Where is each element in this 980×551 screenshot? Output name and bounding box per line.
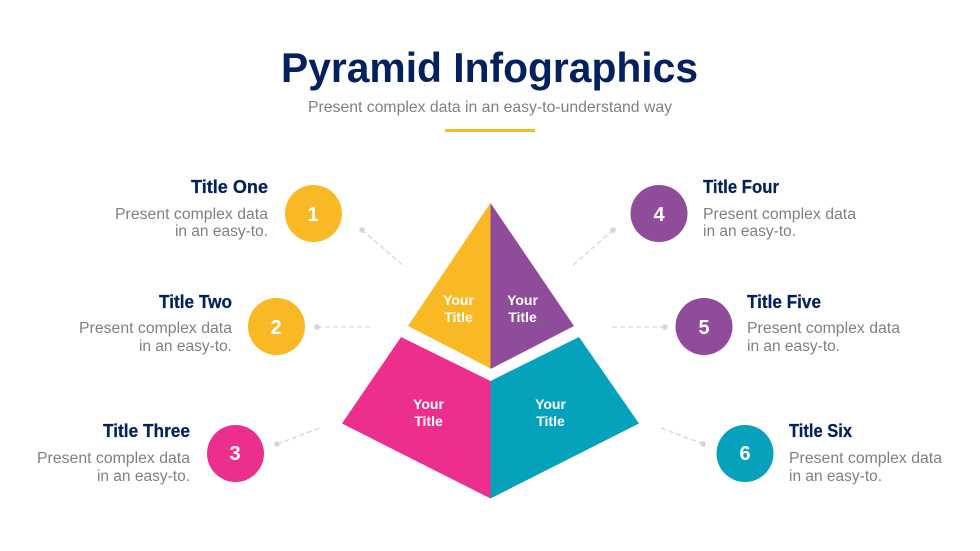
text block 2: Title Two [159, 292, 232, 312]
pyramid segment: pink bottom left: Your [413, 396, 444, 412]
pyramid segment: yellow top left: Title [444, 309, 473, 325]
connector 4 [571, 227, 616, 267]
text block 1: in an easy-to. [175, 223, 268, 240]
item 3 [37, 421, 264, 485]
pyramid segment: teal bottom right [490, 337, 639, 498]
pyramid segment: purple top right: Your [507, 292, 538, 308]
connector 2 [314, 324, 371, 330]
text block 1: Present complex data [115, 206, 268, 223]
connector 6 [661, 428, 706, 447]
item 5 [676, 292, 900, 355]
pyramid diagram [342, 203, 639, 498]
text block 3: Present complex data [37, 450, 190, 467]
item 6 [716, 421, 942, 485]
text block 5: Present complex data [747, 320, 900, 337]
text block 4 [703, 177, 856, 240]
text block 6: in an easy-to. [789, 468, 882, 485]
text block 4: in an easy-to. [703, 223, 796, 240]
pyramid segment: teal bottom right: Title [536, 413, 565, 429]
text block 6: Title Six [789, 421, 852, 441]
pyramid segment: purple top right [490, 203, 574, 369]
badge 3: 3 [229, 443, 241, 465]
badge 4: 4 [653, 204, 665, 226]
badge 5 [676, 298, 732, 355]
text block 6 [789, 421, 942, 485]
pyramid segment: purple top right: Title [508, 309, 537, 325]
connector 5 [612, 324, 668, 330]
pyramid segment: pink bottom left: Title [414, 413, 443, 429]
pyramid segment: pink bottom left [342, 337, 490, 498]
title: Pyramid Infographics [281, 44, 698, 91]
item 2 [79, 292, 305, 355]
item 1 [115, 177, 342, 242]
item 4 [630, 177, 856, 242]
badge 1 [285, 185, 342, 242]
text block 1: Title One [191, 177, 268, 197]
badge 1: 1 [307, 204, 319, 226]
badge 6: 6 [739, 443, 751, 465]
badge 2 [248, 298, 305, 355]
text block 2: Present complex data [79, 320, 232, 337]
pyramid segment: yellow top left [408, 203, 490, 368]
text block 3: Title Three [103, 421, 190, 441]
pyramid segment: yellow top left: Your [443, 292, 474, 308]
text block 4: Present complex data [703, 206, 856, 223]
text block 3 [37, 421, 190, 485]
connector 3 [274, 428, 320, 447]
text block 2 [79, 292, 232, 355]
title accent bar [445, 129, 535, 132]
text block 5: in an easy-to. [747, 338, 840, 355]
badge 6 [716, 425, 774, 482]
text block 3: in an easy-to. [97, 468, 190, 485]
text block 5 [747, 292, 900, 355]
text block 5: Title Five [747, 292, 821, 312]
text block 2: in an easy-to. [139, 338, 232, 355]
text block 6: Present complex data [789, 450, 942, 467]
connector 1 [359, 227, 405, 267]
text block 1 [115, 177, 268, 240]
badge 4 [630, 185, 688, 242]
pyramid segment: teal bottom right: Your [535, 396, 566, 412]
badge 5: 5 [698, 317, 710, 339]
badge 3 [207, 425, 264, 482]
subtitle: Present complex data in an easy-to-understand way [308, 99, 672, 116]
text block 4: Title Four [703, 177, 779, 197]
badge 2: 2 [270, 317, 282, 339]
